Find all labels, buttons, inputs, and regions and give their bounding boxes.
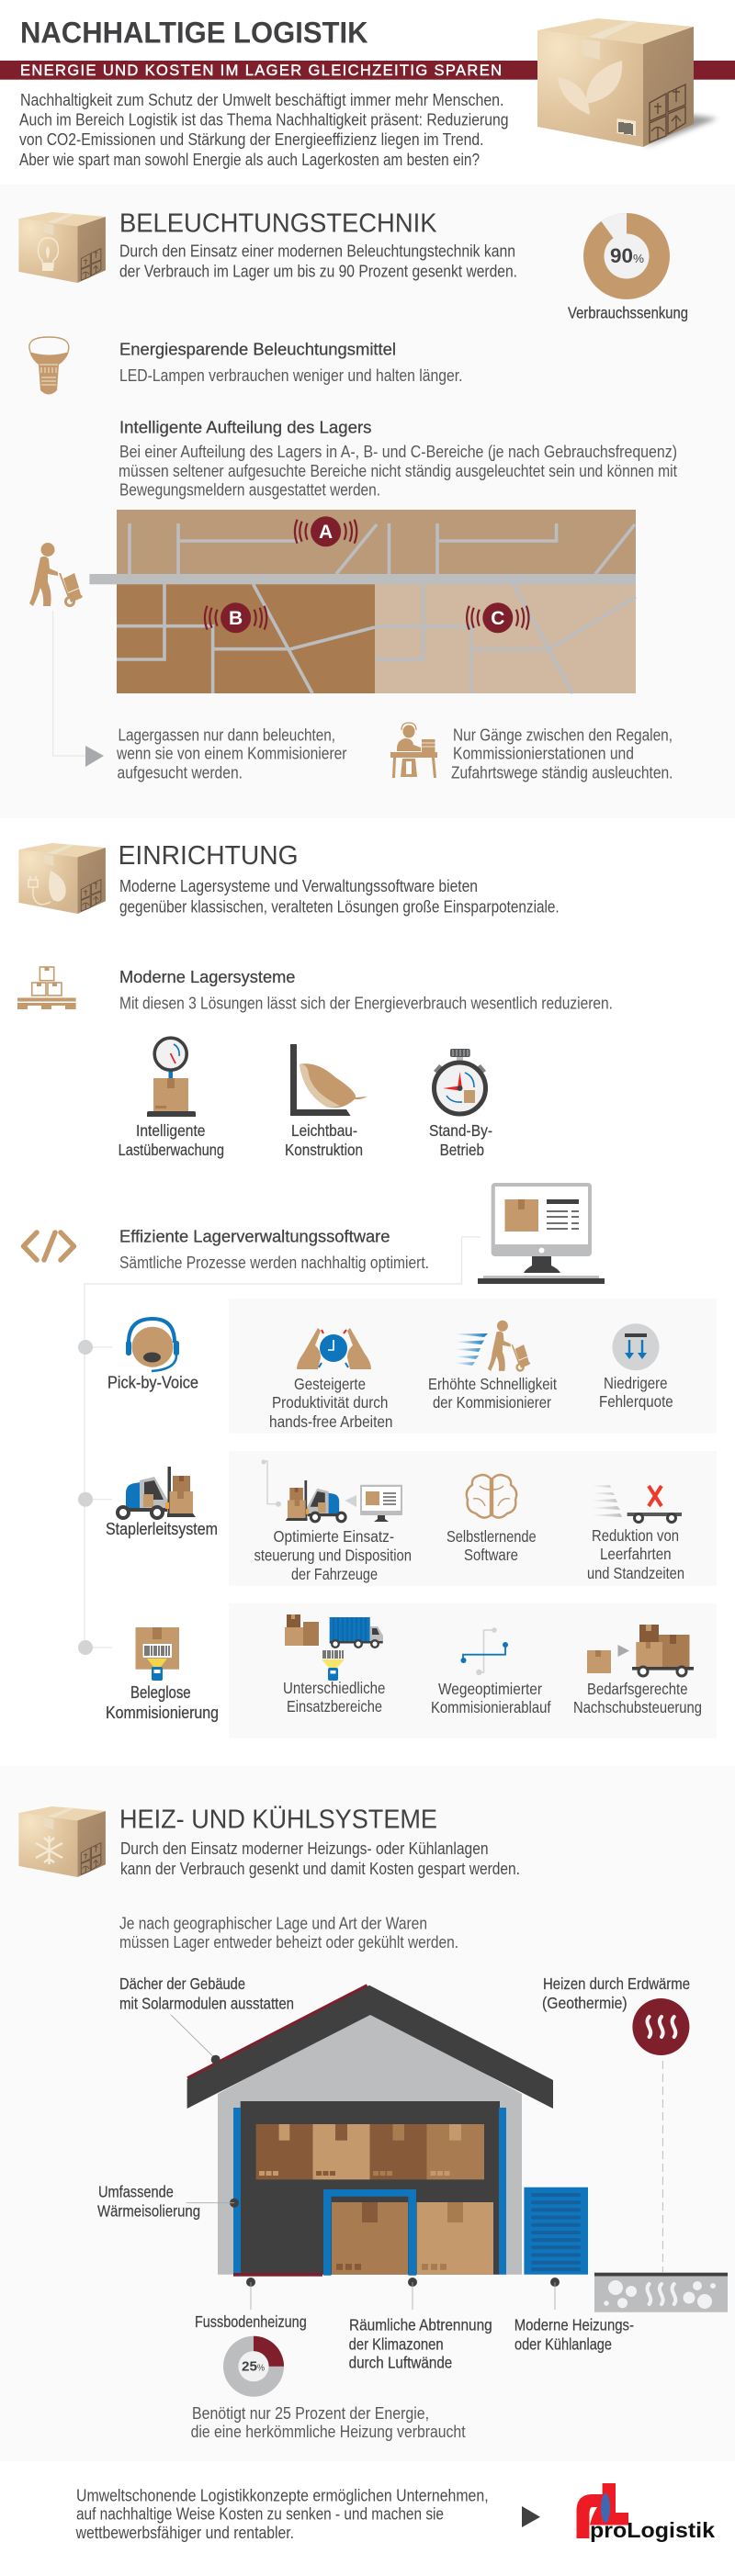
panel background <box>229 1451 717 1586</box>
icon: worker at desk <box>390 723 437 778</box>
icon: LED lamp <box>29 337 69 395</box>
text: Reduktion von <box>592 1526 679 1545</box>
text: Optimierte Einsatz- <box>274 1527 394 1546</box>
pins <box>186 2055 560 2310</box>
label: Leichtbau <box>285 1121 363 1159</box>
logo: proLogistik: proLogistik <box>590 2518 715 2542</box>
text: der Kommisionierer <box>433 1393 551 1412</box>
text: Lagergassen <box>116 726 347 782</box>
label: Stand-By: Stand-By- <box>429 1121 492 1140</box>
callout: insulation: Wärmeisolierung <box>97 2201 200 2220</box>
text block: geography <box>119 1914 458 1952</box>
arrow: footer <box>522 2506 540 2527</box>
section text: kann der Verbrauch gesenkt und damit Kosten gespart werden. <box>120 1859 520 1878</box>
lower boxes <box>332 2202 493 2275</box>
section text <box>120 1839 520 1878</box>
text: Nachschubsteuerung <box>573 1698 702 1716</box>
text: Kommisionierablauf <box>431 1698 551 1716</box>
icon: boxes truck scanner <box>285 1614 383 1681</box>
text: Fehlerquote <box>599 1392 673 1411</box>
footer text: Umweltschonende Logistikkonzepte ermöglichen Unternehmen, <box>76 2485 489 2504</box>
panel background <box>229 1299 717 1434</box>
chart: donut 25 percent: % <box>257 2364 265 2374</box>
subtitle band: ENERGIE UND KOSTEN IM LAGER GLEICHZEITIG SPAREN <box>20 62 503 79</box>
label <box>106 1682 219 1722</box>
footer text <box>75 2485 489 2542</box>
callout: air walls: Räumliche Abtrennung <box>349 2315 492 2334</box>
callout: insulation: Umfassende <box>98 2183 174 2201</box>
subheading: Lagerverwaltungssoftware: Effiziente Lagerverwaltungssoftware <box>119 1227 390 1246</box>
text <box>269 1375 393 1431</box>
icon: forklift dispatch <box>261 1460 402 1522</box>
icon: fast worker <box>453 1321 530 1371</box>
callout: floor heating: Fussbodenheizung <box>195 2312 307 2331</box>
callout: modern systems: oder Kühlanlage <box>514 2334 612 2353</box>
callout: air walls: durch Luftwände <box>349 2353 452 2371</box>
subheading: Moderne Lagersysteme: Mit diesen 3 Lösungen lässt sich der Energieverbrauch wesentlich reduzieren. <box>119 993 613 1012</box>
text block: geography: müssen Lager entweder beheizt oder gekühlt werden. <box>119 1932 458 1952</box>
icon: headset head <box>126 1319 179 1371</box>
label: Leichtbau: Leichtbau- <box>291 1121 357 1140</box>
section text: Durch den Einsatz moderner Heizungs- oder Kühlanlagen <box>120 1839 489 1858</box>
callout: air walls: der Klimazonen <box>349 2334 444 2353</box>
heading: HEIZ- UND KÜHLSYSTEME <box>119 1805 437 1835</box>
chart: donut 25 percent <box>223 2336 284 2397</box>
label: Lastüberwachung <box>119 1121 224 1159</box>
callout: geothermal <box>542 1974 690 2012</box>
callout: solar roofs <box>119 1974 294 2059</box>
callout: insulation <box>97 2183 200 2220</box>
icon: route <box>461 1627 508 1675</box>
text: Leerfahrten <box>600 1545 672 1563</box>
subheading: Lagerverwaltungssoftware: Sämtliche Prozesse werden nachhaltig optimiert. <box>119 1253 429 1272</box>
subheading: Beleuchtungsmittel: Energiesparende Beleuchtungsmittel <box>119 340 396 359</box>
icon: box with snowflake <box>18 1806 106 1877</box>
marker C: C <box>491 608 504 629</box>
dashed line <box>662 2061 663 2273</box>
label: Stand-By: Betrieb <box>440 1141 484 1159</box>
panel: Staplerleitsystem <box>106 1451 717 1586</box>
intro text: von CO2-Emissionen und Stärkung der Energieeffizienz liegen im Trend. <box>19 129 483 149</box>
callout: modern systems: Moderne Heizungs- <box>514 2315 634 2334</box>
text block: geography: Je nach geographischer Lage und Art der Waren <box>119 1914 427 1933</box>
text: Lagergassen: wenn sie von einem Kommisionierer <box>116 744 347 763</box>
icon: worker with hand truck <box>29 543 83 606</box>
callout: geothermal: (Geothermie) <box>542 1994 628 2012</box>
text <box>428 1375 557 1412</box>
icon: box with plug and leaf <box>18 843 106 914</box>
chart: donut 90 percent <box>583 213 670 299</box>
intro text: Aber wie spart man sowohl Energie als auch Lagerkosten am besten ein? <box>19 150 480 169</box>
icon: box with barcode scanner <box>136 1627 179 1681</box>
section text <box>119 876 560 916</box>
text: Lagergassen: Lagergassen nur dann beleuchten, <box>118 726 335 745</box>
text: und Standzeiten <box>587 1564 684 1582</box>
label: Lastüberwachung: Intelligente <box>136 1121 206 1140</box>
label: Leichtbau: Konstruktion <box>285 1141 363 1159</box>
section text: Moderne Lagersysteme und Verwaltungssoftware bieten <box>119 876 478 895</box>
icon: hands with clock <box>297 1328 371 1369</box>
icon: scale <box>147 1038 196 1117</box>
marker B: B <box>229 608 243 629</box>
marker A <box>295 516 356 546</box>
text: floor heating note: Benötigt nur 25 Prozent der Energie, <box>192 2403 429 2423</box>
text <box>431 1680 551 1716</box>
callout: modern systems <box>514 2315 634 2353</box>
panel: Einrichtung <box>17 841 717 1738</box>
text: Nur Gänge: Kommissionierstationen und <box>453 744 634 763</box>
icon: replenishment cart <box>587 1625 694 1676</box>
icon: brain <box>467 1475 516 1518</box>
icon: feather on scale <box>290 1044 368 1116</box>
label: Kommisionierung <box>106 1703 219 1722</box>
subheading: Lagerverwaltungssoftware <box>119 1227 429 1272</box>
panel background <box>229 1603 717 1738</box>
subheading: Aufteilung <box>119 418 677 499</box>
callout: solar roofs: mit Solarmodulen ausstatten <box>119 1994 294 2012</box>
text: Produktivität durch <box>272 1393 388 1412</box>
panel: Heiz- und Kühlsysteme <box>18 1805 728 2441</box>
arrow: worker connector <box>53 611 104 767</box>
text: floor heating note: die eine herkömmliche Heizung verbraucht <box>191 2422 466 2441</box>
text: Einsatzbereiche <box>287 1697 382 1715</box>
label: Pick-by-Voice <box>107 1373 198 1392</box>
icon: code brackets <box>24 1232 74 1260</box>
text: Nur Gänge: Nur Gänge zwischen den Regalen, <box>453 726 673 745</box>
intro text: Auch im Bereich Logistik ist das Thema Nachhaltigkeit präsent: Reduzierung <box>19 110 509 129</box>
callout: geothermal: Heizen durch Erdwärme <box>543 1974 690 1993</box>
intro text <box>19 90 509 169</box>
text: Selbstlernende <box>447 1527 537 1546</box>
text: Niedrigere <box>604 1374 667 1392</box>
subtitle band <box>0 61 735 80</box>
text <box>599 1374 673 1411</box>
subheading: Moderne Lagersysteme <box>119 967 613 1012</box>
illustration: geothermal ground <box>594 2272 728 2312</box>
chart: donut 90 percent: 90 <box>610 244 633 267</box>
floor heating strip <box>233 2273 322 2277</box>
text: Erhöhte Schnelligkeit <box>428 1375 557 1393</box>
text <box>447 1527 537 1564</box>
footer text: auf nachhaltige Weise Kosten zu senken - und machen sie <box>76 2503 444 2523</box>
text <box>283 1679 385 1715</box>
text <box>573 1680 702 1716</box>
text <box>254 1527 412 1583</box>
text: Nur Gänge <box>451 726 673 782</box>
callout: air walls <box>349 2315 492 2371</box>
icon: pallet with boxes <box>17 967 76 1009</box>
panel: Beleglose Kommisionierung <box>106 1603 717 1738</box>
label: Beleglose <box>130 1682 191 1702</box>
timeline dots <box>78 1340 93 1655</box>
illustration: warehouse building <box>187 1985 553 2277</box>
text: der Fahrzeuge <box>291 1565 378 1583</box>
section text: der Verbrauch im Lager um bis zu 90 Prozent gesenkt werden. <box>119 262 517 281</box>
text: Nur Gänge: Zufahrtswege ständig ausleuchten. <box>451 763 673 782</box>
marker C <box>467 602 528 633</box>
heading: BELEUCHTUNGSTECHNIK <box>119 209 437 239</box>
marker B <box>205 602 266 633</box>
text: floor heating note <box>191 2403 466 2441</box>
intro text: Nachhaltigkeit zum Schutz der Umwelt beschäftigt immer mehr Menschen. <box>20 90 503 109</box>
text: hands-free Arbeiten <box>269 1412 393 1431</box>
chart: donut 90 percent: % <box>633 252 644 265</box>
icon: lower error rate <box>612 1323 660 1370</box>
chart: donut 25 percent: 25 <box>242 2359 257 2375</box>
subheading: Moderne Lagersysteme: Moderne Lagersysteme <box>119 967 295 986</box>
subheading: Beleuchtungsmittel <box>119 340 463 385</box>
section text: Durch den Einsatz einer modernen Beleuchtungstechnik kann <box>119 241 515 260</box>
chart: warehouse map ABC <box>89 510 636 693</box>
subheading: Aufteilung: Intelligente Aufteilung des Lagers <box>119 418 371 437</box>
title: NACHHALTIGE LOGISTIK <box>20 17 368 50</box>
connector line <box>85 1237 481 1648</box>
heading: EINRICHTUNG <box>119 841 299 871</box>
text <box>587 1526 684 1582</box>
air wall door frame <box>323 2189 416 2276</box>
text: Wegeoptimierter <box>438 1680 542 1698</box>
donut label: Verbrauchssenkung <box>568 304 688 322</box>
icon: stopwatch <box>434 1049 486 1114</box>
icon: cooling unit <box>524 2188 588 2275</box>
section text: gegenüber klassischen, veralteten Lösungen große Einsparpotenziale. <box>119 896 560 916</box>
subheading: Beleuchtungsmittel: LED-Lampen verbrauchen weniger und halten länger. <box>119 366 463 385</box>
label: Stand-By <box>429 1121 492 1159</box>
text: Lagergassen: aufgesucht werden. <box>118 763 243 782</box>
subheading: Aufteilung: Bewegungsmeldern ausgestattet werden. <box>119 479 380 499</box>
text: Software <box>464 1546 518 1564</box>
icon: monitor <box>478 1183 605 1284</box>
icon: empty trips reduced <box>587 1485 682 1523</box>
label: Staplerleitsystem <box>106 1519 218 1538</box>
text: Gesteigerte <box>294 1375 366 1393</box>
icon: main box with leaf <box>537 18 718 148</box>
icon: forklift <box>118 1467 196 1518</box>
logo: proLogistik <box>577 2483 715 2542</box>
label: Lastüberwachung: Lastüberwachung <box>119 1141 224 1159</box>
icon: box with bulb <box>18 212 106 283</box>
callout: solar roofs: Dächer der Gebäude <box>119 1974 245 1993</box>
marker A: A <box>319 522 333 543</box>
section text <box>119 241 517 281</box>
text: Bedarfsgerechte <box>587 1680 687 1698</box>
text: steuerung und Disposition <box>254 1546 412 1564</box>
panel: Pick-by-Voice <box>107 1299 717 1434</box>
icon: heat circle <box>632 1998 689 2055</box>
text: Unterschiedliche <box>283 1679 385 1697</box>
upper boxes <box>256 2124 484 2179</box>
footer text: wettbewerbsfähiger und rentabler. <box>75 2523 294 2542</box>
